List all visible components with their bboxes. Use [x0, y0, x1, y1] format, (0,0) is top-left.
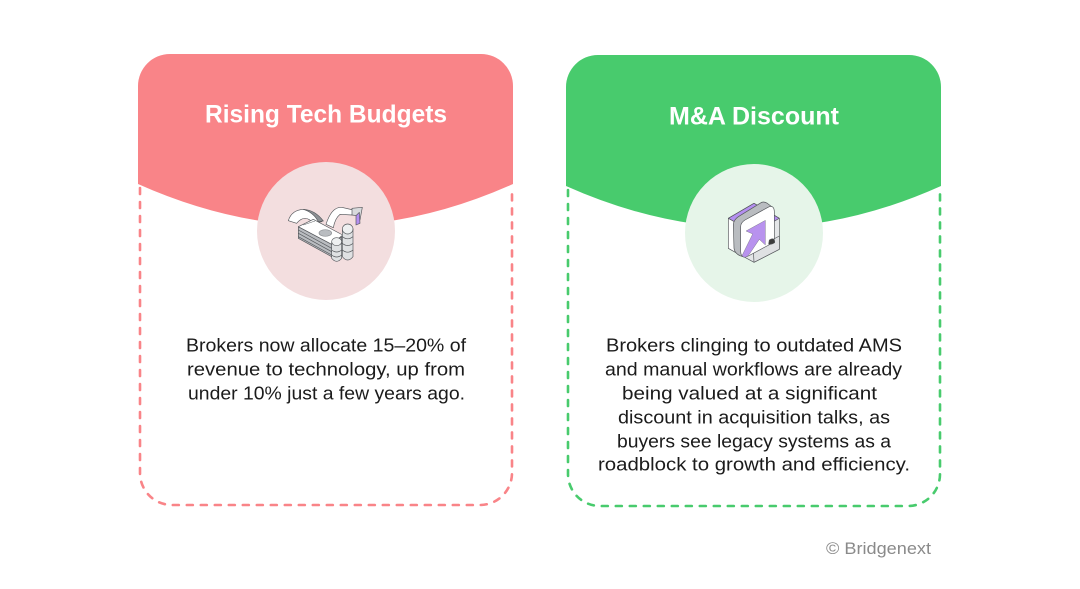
- heading: m&a discount: M&A Discount: [669, 102, 840, 130]
- text block: brokers allocation: under 10% just a few years ago.: [188, 382, 465, 404]
- header shape: green curved banner: [566, 55, 941, 228]
- text block: legacy systems discount: buyers see legacy systems as a: [617, 430, 892, 452]
- panel: rising tech budgets: [138, 54, 513, 505]
- credit: copyright bridgenext: © Bridgenext: [826, 540, 931, 558]
- icon: money stack and coins: [288, 207, 362, 261]
- card outline: green dashed: [568, 190, 940, 506]
- text block: brokers allocation: Brokers now allocate 15–20% of: [186, 334, 467, 356]
- icon circle: pale green: [685, 164, 823, 302]
- text block: brokers allocation: [186, 334, 467, 404]
- icon circle: pale red: [257, 162, 395, 300]
- text block: legacy systems discount: discount in acquisition talks, as: [618, 406, 890, 428]
- text block: legacy systems discount: and manual workflows are already: [605, 358, 903, 380]
- text block: legacy systems discount: being valued at a significant: [622, 382, 878, 404]
- panel: m&a discount: [566, 55, 941, 506]
- text block: brokers allocation: revenue to technology, up from: [187, 358, 465, 380]
- heading: rising tech budgets: Rising Tech Budgets: [205, 100, 447, 128]
- card outline: red dashed: [140, 188, 512, 505]
- icon: document with rising arrow: [728, 202, 779, 262]
- text block: legacy systems discount: roadblock to growth and efficiency.: [598, 454, 910, 474]
- text block: legacy systems discount: [598, 334, 910, 474]
- text block: legacy systems discount: Brokers clinging to outdated AMS: [606, 334, 902, 356]
- header shape: red curved banner: [138, 54, 513, 226]
